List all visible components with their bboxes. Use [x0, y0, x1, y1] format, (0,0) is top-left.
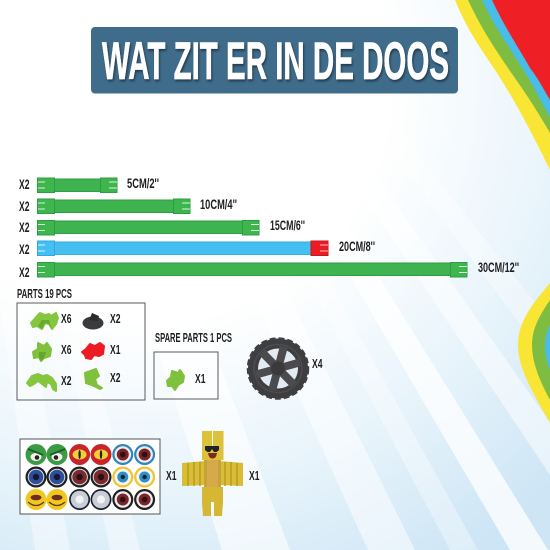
strip row: 5cm	[19, 176, 159, 192]
stickers: black ring brown eyes	[112, 489, 155, 510]
panel: parts	[17, 303, 145, 400]
part: black base x2: X2	[110, 311, 120, 326]
figure torso	[204, 460, 221, 487]
part: green long connector x2: X2	[61, 373, 72, 388]
part: green corner connector x2: X2	[110, 370, 120, 385]
strip row: 5cm: 5CM/2''	[127, 176, 159, 191]
part: green connector x6: X6	[61, 342, 72, 357]
figure head	[202, 431, 224, 460]
icon: yellow figure	[182, 431, 243, 516]
figure sunglasses	[205, 446, 219, 452]
part: red connector x1: X1	[110, 342, 120, 357]
stickers: blue ring eyes	[112, 444, 155, 465]
icon: wheel	[248, 338, 308, 399]
strip row: 15cm: X2	[19, 220, 30, 235]
part: green spare connector	[167, 370, 184, 390]
panel: spare parts	[154, 352, 218, 399]
figure smile	[208, 453, 217, 459]
strip row: 15cm	[19, 218, 305, 235]
stickers: green angry eyes	[26, 444, 68, 465]
strip row: 20cm: 20CM/8''	[339, 239, 375, 254]
decorative wave: right side	[518, 283, 550, 423]
quantity: wheels: X4	[312, 356, 323, 371]
stickers: yellow mouths	[26, 489, 68, 510]
stickers: yellow ring blue eyes	[112, 466, 155, 488]
heading: parts: PARTS 19 PCS	[17, 287, 72, 301]
strip row: 10cm: X2	[19, 199, 30, 214]
title banner	[91, 27, 458, 94]
strip row: 10cm: 10CM/4''	[200, 197, 237, 212]
stickers: dark ring blue eyes	[26, 466, 68, 488]
figure legs	[202, 487, 223, 516]
stickers: red cat eyes	[69, 444, 112, 465]
heading: spare parts: SPARE PARTS 1 PCS	[155, 331, 232, 345]
strip row: 10cm	[19, 197, 237, 214]
strip row: 20cm	[19, 239, 375, 257]
figure arms	[182, 461, 205, 486]
strip row: 30cm	[19, 260, 519, 280]
quantity: figure: X1	[249, 468, 260, 483]
decorative wave: top right	[455, 0, 550, 170]
strip row: 30cm: 30CM/12''	[478, 260, 519, 275]
strip row: 5cm: X2	[19, 177, 30, 192]
panel: sticker sheet	[20, 439, 160, 514]
strip row: 15cm: 15CM/6''	[270, 218, 305, 233]
part: green connector x6: X6	[61, 311, 72, 326]
stickers: silver eyes	[69, 489, 112, 510]
quantity: stickers: X1	[166, 468, 176, 483]
stickers: dark ring brown eyes	[69, 466, 112, 488]
strip row: 20cm: X2	[19, 242, 30, 257]
quantity: spare: X1	[195, 371, 206, 386]
strip row: 30cm: X2	[19, 265, 30, 280]
